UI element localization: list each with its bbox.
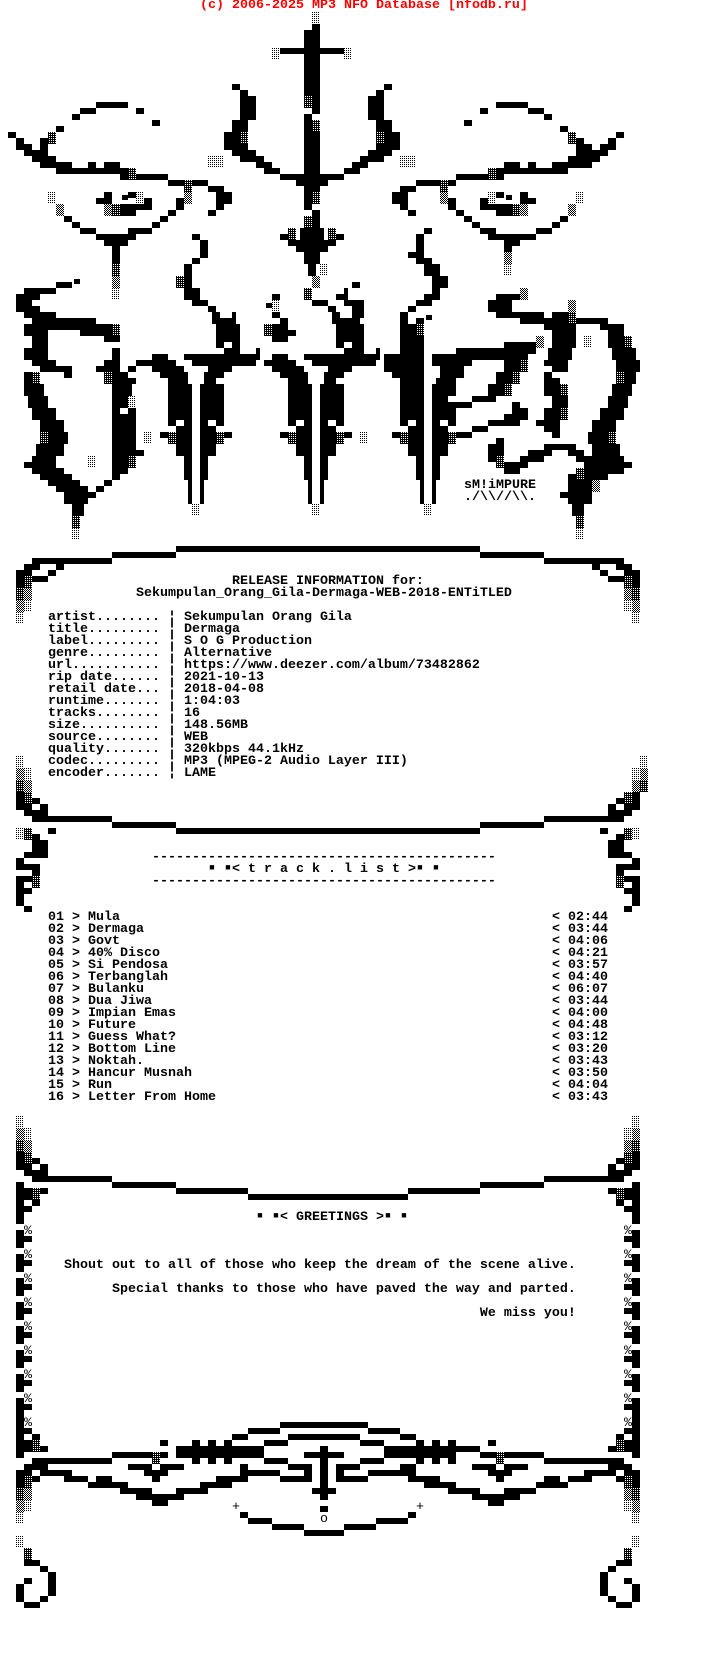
- frame: release information top border: [16, 549, 640, 624]
- frame: greetings top border and side columns: %: [624, 1296, 632, 1311]
- heading: greetings: ■: [385, 1211, 391, 1221]
- frame: greetings top border and side columns: [16, 1116, 640, 1455]
- logo: ENTiTLED gothic ascii logo: [8, 12, 640, 540]
- frame: greetings top border and side columns: %: [24, 1392, 32, 1407]
- heading: release information: RELEASE INFORMATION for: Sekumpulan_Orang_Gila-Dermaga-WEB-2018-ENTiTLED: [136, 574, 512, 601]
- track list: < 02:44 < 03:44 < 04:06 < 04:21 < 03:57 < 04:40 < 06:07 < 03:44 < 04:00 < 04:48 < 03:12 < 03:20 < 03:43 < 03:50 < 04:04 < 03:43: [552, 910, 608, 1105]
- frame: greetings top border and side columns: %: [24, 1368, 32, 1383]
- bottom ornament with central cross: +: [232, 1500, 240, 1515]
- frame: greetings top border and side columns: %: [624, 1392, 632, 1407]
- bottom ornament with central cross: +: [416, 1500, 424, 1515]
- heading: greetings: < GREETINGS >: [280, 1210, 384, 1225]
- frame: greetings top border and side columns: %: [24, 1344, 32, 1359]
- bottom ornament with central cross: o: [320, 1512, 328, 1527]
- frame: greetings top border and side columns: %: [24, 1416, 32, 1431]
- frame: greetings top border and side columns: %: [624, 1248, 632, 1263]
- heading: track list: ■: [225, 863, 231, 873]
- frame: greetings top border and side columns: %: [624, 1272, 632, 1287]
- heading: greetings: ■: [273, 1211, 279, 1221]
- bottom corner curls: [16, 1536, 640, 1605]
- frame: greetings top border and side columns: %: [24, 1320, 32, 1335]
- release details table: artist........ ¦ Sekumpulan Orang Gila title......... ¦ Dermaga label......... ¦ S O G Production genre......... ¦ Alternative url........... ¦ https://www.deezer.com/album/73482862 rip date...... ¦ 2021-10-13 retail date... ¦ 2018-04-08 runtime....... ¦ 1:04:03 tracks........ ¦ 16 size.......... ¦ 148.56MB source........ ¦ WEB quality....... ¦ 320kbps 44.1kHz codec......... ¦ MP3 (MPEG-2 Audio Layer III) encoder....... ¦ LAME: [48, 610, 480, 781]
- heading: greetings: ■: [257, 1211, 263, 1221]
- frame: greetings top border and side columns: %: [24, 1272, 32, 1287]
- frame: greetings top border and side columns: %: [624, 1416, 632, 1431]
- frame: greetings top border and side columns: %: [624, 1320, 632, 1335]
- greetings message: Shout out to all of those who keep the dream of the scene alive. Special thanks to those who have paved the way and parted. We miss you!: [64, 1258, 576, 1321]
- heading: track list: ■: [433, 863, 439, 873]
- artist credit under logo: sM!iMPURE ./\\//\\.: [464, 478, 536, 505]
- track list: 01 > Mula 02 > Dermaga 03 > Govt 04 > 40% Disco 05 > Si Pendosa 06 > Terbanglah 07 > Bulanku 08 > Dua Jiwa 09 > Impian Emas 10 > Future 11 > Guess What? 12 > Bottom Line 13 > Noktah. 14 > Hancur Musnah 15 > Run 16 > Letter From Home: [48, 910, 216, 1105]
- frame: greetings top border and side columns: %: [624, 1224, 632, 1239]
- bottom ornament with central cross: [16, 1425, 640, 1533]
- heading: greetings: [257, 1210, 407, 1225]
- frame: release information bottom border and track list top: [16, 756, 648, 909]
- frame: greetings top border and side columns: %: [24, 1224, 32, 1239]
- heading: track list: ■: [209, 863, 215, 873]
- heading: greetings: ■: [401, 1211, 407, 1221]
- frame: greetings top border and side columns: %: [24, 1296, 32, 1311]
- track list: [48, 910, 608, 1105]
- frame: greetings top border and side columns: %: [624, 1368, 632, 1383]
- frame: greetings top border and side columns: %: [624, 1344, 632, 1359]
- heading: track list: ------------------------------------------- < t r a c k . l i s t > -------------------------------------------: [152, 850, 496, 889]
- heading: track list: ■: [417, 863, 423, 873]
- frame: greetings top border and side columns: %: [24, 1248, 32, 1263]
